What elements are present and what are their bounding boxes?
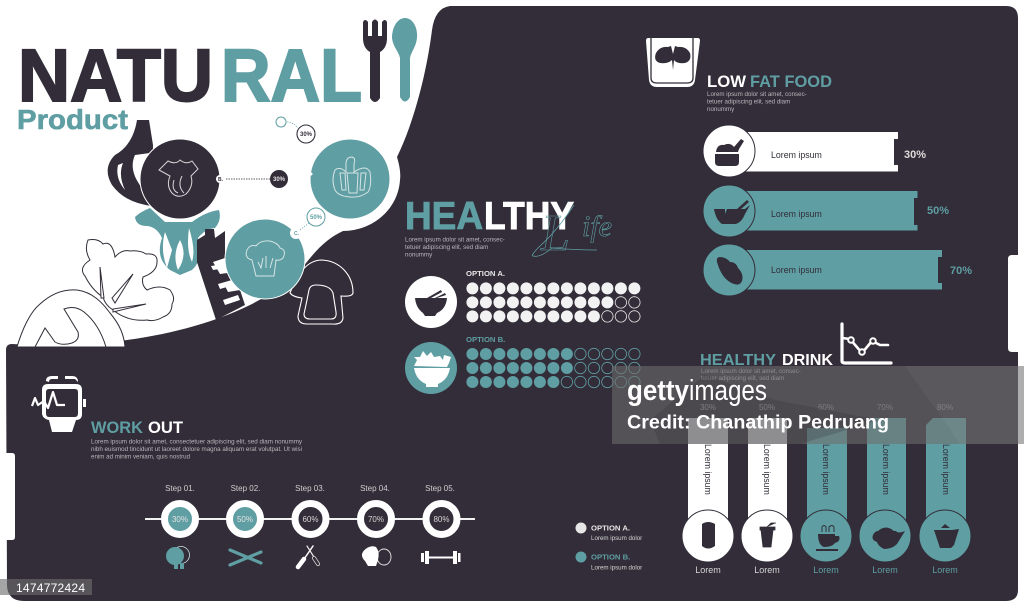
heading: Healthy: LTHY: [484, 195, 574, 238]
icon: line chart: [842, 324, 891, 363]
image id tag: 1474772424: [16, 581, 85, 595]
bar: 70%: Lorem ipsum: [771, 265, 822, 275]
icon: table tennis paddles: [166, 546, 190, 569]
heading: low fat food: LOW: [707, 72, 747, 91]
drink column 5: Lorem: [932, 565, 958, 575]
illustration: mushroom: [290, 260, 353, 324]
drink column 4: [859, 403, 911, 575]
icon: bowl with chopsticks: [405, 276, 457, 328]
text: healthy drink description: Lorem ipsum dolor sit amet, consec-: [701, 368, 801, 375]
tab: left edge: [6, 453, 15, 540]
circle: broccoli icon: C.: [294, 231, 300, 237]
text: healthy description: tetuer adipiscing elit, sed diam: [405, 244, 488, 251]
drink column 3: 60%: [818, 403, 834, 412]
step 2: Step 02.: [231, 484, 260, 493]
legend: [576, 522, 642, 572]
watermark band: [612, 366, 1024, 444]
step 5: Step 05.: [425, 484, 455, 493]
drink column 3: Lorem ipsum: [821, 444, 831, 495]
heading: Healthy: HEA: [405, 195, 483, 238]
callout: A 30%: [276, 117, 315, 143]
callout: C 50%: 50%: [310, 215, 323, 221]
icon: crossed bats: [230, 550, 261, 565]
drink column 2: 50%: [759, 403, 775, 412]
drink column 4: Lorem: [872, 565, 898, 575]
step 5: [425, 484, 457, 534]
callout: B 30%: [226, 170, 288, 188]
text: work out description: enim ad minim veniam, quis nostrud: [91, 454, 191, 460]
callout: B 30%: 30%: [273, 177, 286, 183]
watermark band: Credit: Chanathip Pedruang: [627, 412, 889, 434]
drink column 1: Lorem ipsum: [703, 444, 713, 495]
step 4: [360, 484, 392, 534]
dot chart: option A: [466, 282, 640, 322]
step 2: [230, 484, 260, 534]
step 1: [164, 484, 196, 534]
bar: 30%: 30%: [904, 149, 926, 161]
legend: OPTION A.: [591, 524, 630, 532]
dot chart: option B: [466, 348, 640, 388]
drink column 5: 80%: [937, 403, 953, 412]
heading: work out: WORK: [91, 419, 143, 437]
illustration: bok choy: [135, 208, 220, 275]
step 1: Step 01.: [165, 484, 195, 493]
heading: work out: OUT: [148, 419, 183, 437]
step 4: 70%: [368, 515, 384, 524]
icon: weighing scale: [646, 38, 700, 87]
icon: crossed tools: [298, 546, 319, 567]
bar: 30%: [703, 125, 926, 177]
script word: Life: ife: [582, 210, 612, 243]
text: healthy drink description: tetuer adipiscing elit, sed diam: [701, 375, 784, 382]
callout: C 50%: [300, 208, 325, 230]
legend: OPTION B.: [591, 552, 630, 562]
drink column 3: [800, 403, 852, 575]
label: option A: OPTION A.: [466, 269, 505, 278]
icon: dumbbell: [421, 551, 460, 564]
text: work out description: Lorem ipsum dolor sit amet, consectetuer adipiscing elit, sed diam nonummy: [91, 438, 303, 446]
illustration: turnip with leaves: [17, 240, 174, 347]
icon: salad bowl: [405, 342, 457, 394]
heading: healthy drink: [700, 352, 833, 369]
script word: Life: L: [540, 205, 570, 262]
drink column 2: Lorem: [754, 565, 780, 575]
heading: low fat food: FAT FOOD: [750, 72, 832, 91]
drink column 1: 30%: [700, 403, 716, 412]
step 5: 80%: [433, 515, 450, 524]
drink column 2: [741, 403, 793, 575]
bar: 70%: 70%: [950, 265, 972, 277]
icon: fork: [363, 20, 387, 102]
drink column 3: Lorem: [813, 565, 839, 575]
bar: 30%: Lorem ipsum: [771, 150, 822, 160]
circle: broccoli icon: [225, 219, 305, 299]
script word: Life: [532, 205, 612, 262]
illustration: garlic: [108, 120, 153, 206]
circle: pepper icon: [310, 140, 390, 218]
step 1: 30%: [172, 515, 188, 524]
drink column 4: 70%: [877, 403, 893, 412]
drink column 5: Lorem ipsum: [941, 444, 951, 495]
text: healthy description: nonummy: [405, 252, 433, 258]
bar: 50%: 50%: [927, 205, 949, 217]
title: Natural Product: Product: [17, 104, 128, 135]
heading: work out: [91, 419, 183, 437]
step 3: 60%: [302, 515, 319, 524]
title: Natural Product: NATU: [18, 34, 213, 117]
legend: Lorem ipsum dolor: [591, 564, 642, 572]
text: healthy description: Lorem ipsum dolor sit amet, consec-: [405, 236, 505, 244]
title: Natural Product: [17, 34, 362, 135]
step 4: Step 04.: [360, 484, 390, 493]
text: low fat description: tetuer adipiscing elit, sed diam: [707, 98, 790, 106]
label: option B: OPTION B.: [466, 335, 505, 344]
drink column 5: [919, 403, 971, 575]
step 2: 50%: [237, 515, 253, 524]
legend: Lorem ipsum dolor: [591, 535, 642, 542]
bar: 50%: Lorem ipsum: [771, 209, 822, 219]
circle: dark vegetable icon: B.: [218, 177, 224, 183]
circle: dark vegetable icon: [140, 139, 224, 219]
text: low fat description: Lorem ipsum dolor sit amet, consec-: [707, 91, 807, 98]
heading: Healthy: [405, 195, 574, 238]
watermark band: images: [689, 375, 767, 407]
step 3: [295, 484, 326, 534]
drink column 4: Lorem ipsum: [881, 444, 891, 495]
icon: spoon: [392, 18, 417, 102]
tab: right edge: [1008, 255, 1018, 352]
illustration: carrot: [197, 229, 245, 320]
drink column 1: [682, 403, 734, 575]
icon: boxing gloves: [362, 546, 391, 566]
text: work out description: nibh euismod tincidunt ut laoreet dolore magna aliquam erat volutpat. Ut wisi: [91, 446, 302, 453]
callout: A 30%: 30%: [300, 132, 313, 138]
title: Natural Product: RAL: [221, 34, 362, 117]
image id tag: [0, 579, 92, 595]
bar: 70%: [703, 244, 972, 296]
drink column 1: Lorem: [695, 565, 721, 575]
timeline: steps: [145, 484, 475, 534]
heading: healthy drink: DRINK: [782, 352, 833, 369]
watermark band: getty: [627, 375, 689, 407]
drink column 2: Lorem ipsum: [762, 444, 772, 495]
icon: smart watch: [32, 376, 86, 432]
step 3: Step 03.: [295, 484, 325, 493]
bar: 50%: [703, 185, 949, 237]
heading: healthy drink: HEALTHY: [700, 352, 776, 369]
text: low fat description: nonummy: [707, 106, 735, 113]
heading: low fat food: [707, 72, 832, 91]
